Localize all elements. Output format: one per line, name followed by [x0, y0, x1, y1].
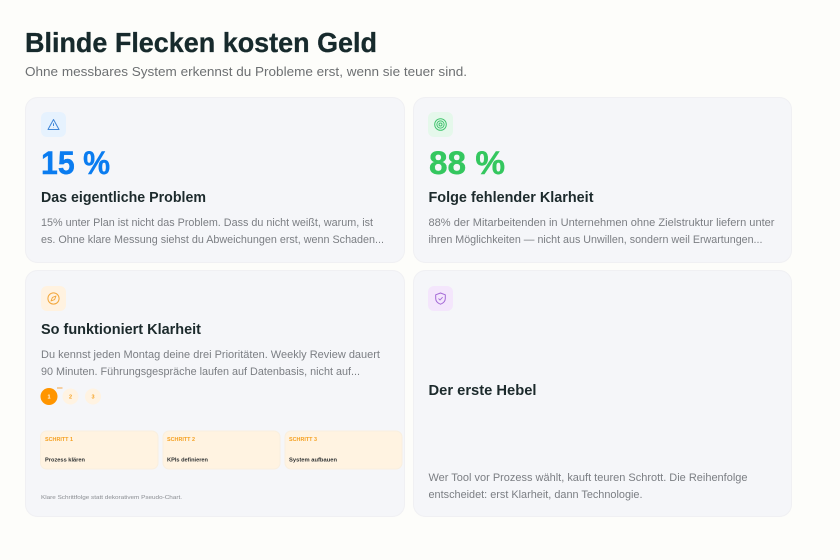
- icon: target: [428, 112, 453, 137]
- icon: compass: [41, 286, 66, 311]
- heading: Folge fehlender Klarheit: [428, 189, 594, 206]
- body text: 88% der Mitarbeitenden in Unternehmen ohne Zielstruktur liefern unter: [428, 217, 775, 229]
- panel: Folge fehlender Klarheit: [414, 98, 792, 262]
- step 3: SCHRITT 3: [289, 437, 317, 443]
- panel: So funktioniert Klarheit: [26, 270, 404, 516]
- body text: [41, 349, 380, 378]
- icon: shield: [428, 286, 453, 311]
- body text: 15% unter Plan ist nicht das Problem. Dass du nicht weißt, warum, ist: [41, 217, 373, 229]
- body text: ihren Möglichkeiten — nicht aus Unwillen, sondern weil Erwartungen...: [428, 234, 762, 246]
- body text: entscheidet: erst Klarheit, dann Technologie.: [428, 489, 642, 501]
- body text: [428, 217, 775, 246]
- icon: warning triangle: [41, 112, 66, 137]
- body text: es. Ohne klare Messung siehst du Abweichungen erst, wenn Schaden...: [41, 234, 384, 246]
- step 3: System aufbauen: [289, 458, 338, 464]
- step 2: SCHRITT 2: [167, 437, 195, 443]
- body text: Wer Tool vor Prozess wählt, kauft teuren Schrott. Die Reihenfolge: [428, 472, 748, 484]
- step 1: Prozess klären: [45, 458, 86, 464]
- step indicator: 1: [47, 394, 51, 400]
- heading: So funktioniert Klarheit: [41, 321, 201, 338]
- body text: [41, 217, 384, 246]
- body text: [428, 472, 748, 501]
- heading: Das eigentliche Problem: [41, 189, 206, 206]
- step 1: SCHRITT 1: [45, 437, 73, 443]
- title: Blinde Flecken kosten Geld: [25, 27, 377, 58]
- body text: 90 Minuten. Führungsgespräche laufen auf Datenbasis, nicht auf...: [41, 366, 360, 378]
- panel: das eigentliche Problem: [26, 98, 404, 262]
- stat: 88 %: 88 %: [429, 145, 505, 181]
- step 2: KPIs definieren: [167, 458, 209, 464]
- subtitle: Ohne messbares System erkennst du Probleme erst, wenn sie teuer sind.: [25, 64, 467, 79]
- body text: Du kennst jeden Montag deine drei Prioritäten. Weekly Review dauert: [41, 349, 380, 361]
- step indicator: 3: [91, 394, 95, 400]
- step 3: [285, 431, 402, 469]
- step indicator: [40, 388, 101, 405]
- panel: Der erste Hebel: [414, 270, 792, 516]
- step indicator: 2: [69, 394, 72, 400]
- footnote: Klare Schrittfolge statt dekorativem Pseudo-Chart.: [41, 495, 183, 501]
- heading: Der erste Hebel: [428, 382, 536, 399]
- step 2: [163, 431, 280, 469]
- stat: 15 %: 15 %: [41, 145, 110, 181]
- step 1: [40, 431, 158, 469]
